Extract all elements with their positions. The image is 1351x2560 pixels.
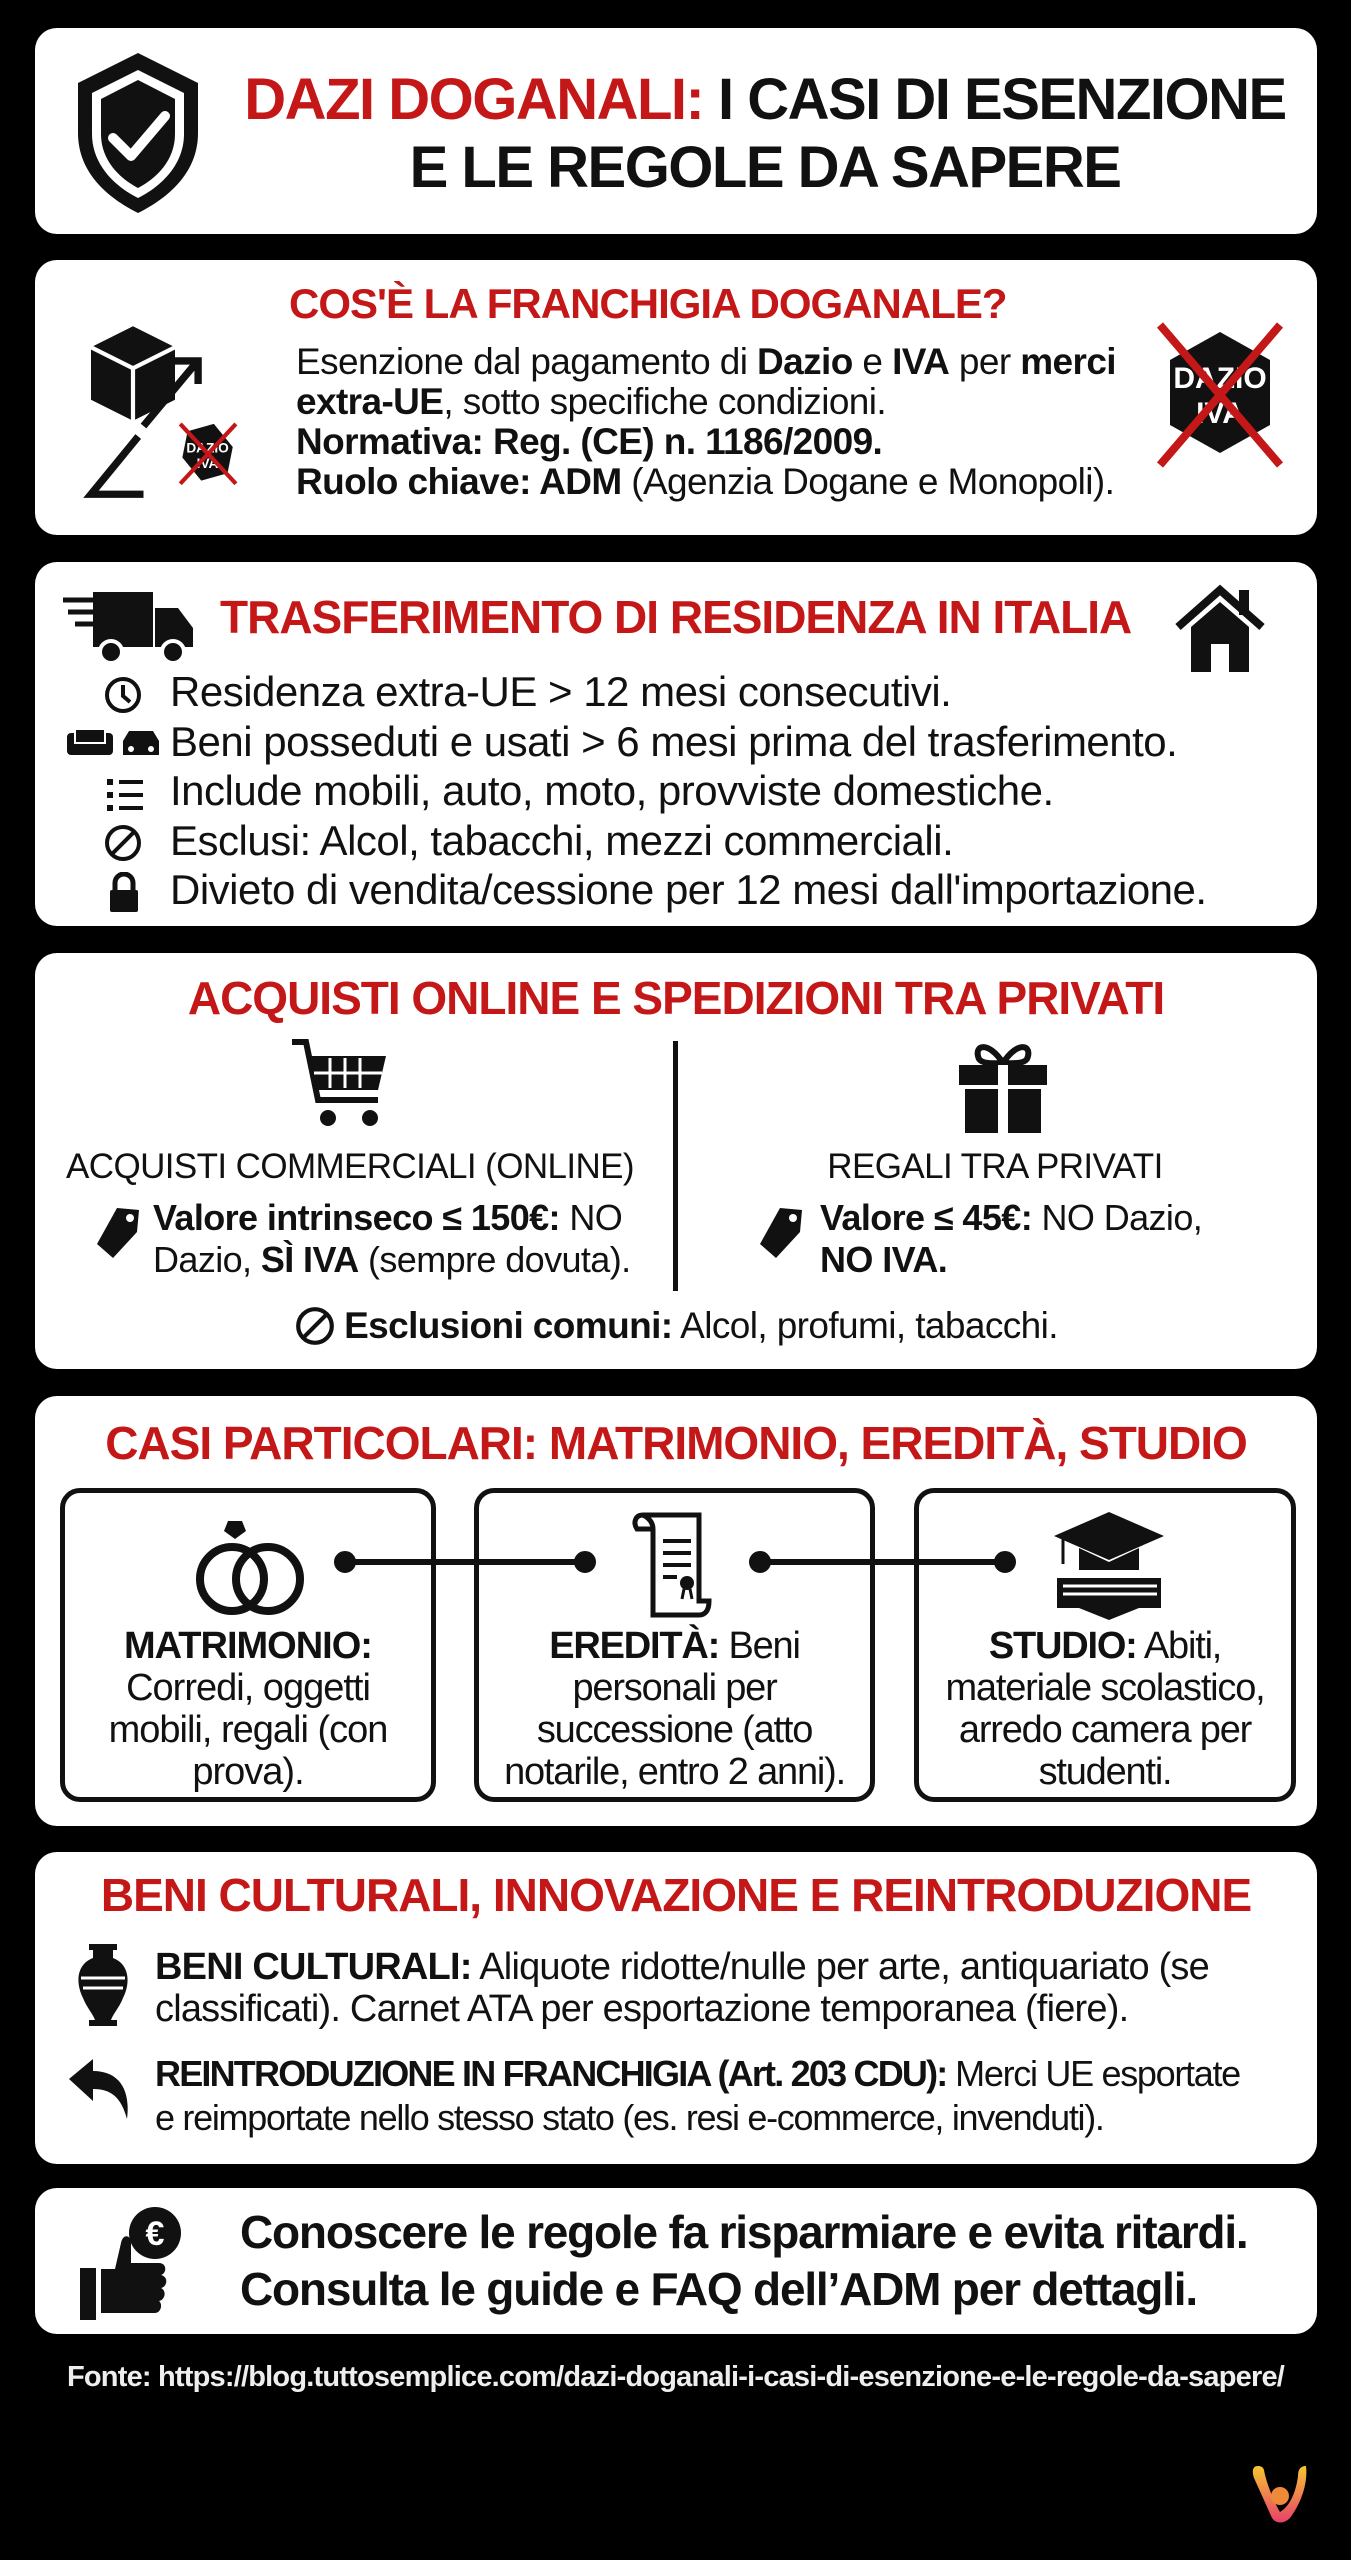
text: conclusione [240, 2206, 1248, 2315]
text: matrimonio: MATRIMONIO: [124, 1625, 372, 1667]
text: eredita [504, 1624, 845, 1793]
text: requisiti: Include mobili, auto, moto, provviste domestiche. [170, 767, 1054, 814]
text: beni culturali: BENI CULTURALI: Aliquote ridotte/nulle per arte, antiquariato (se [155, 1946, 1209, 1988]
text: franchigia body: extra-UE, sotto specifiche condizioni. [296, 381, 886, 422]
text: acquisti commerciali: Dazio, SÌ IVA (sempre dovuta). [153, 1239, 631, 1280]
icon: logo [1252, 2466, 1306, 2522]
panel: casi particolari [35, 1396, 1317, 1826]
text: acquisti commerciali: ACQUISTI COMMERCIALI (ONLINE) [66, 1147, 634, 1186]
card: eredita [474, 1488, 875, 1802]
icon: amphora [78, 1944, 128, 2026]
icon: gift [959, 1044, 1047, 1133]
icon: forbidden [105, 825, 141, 861]
heading: title: E LE REGOLE DA SAPERE [410, 135, 1120, 200]
text: matrimonio: Corredi, oggetti [126, 1667, 370, 1709]
panel: franchigia [35, 260, 1317, 535]
text: beni culturali [155, 1946, 1209, 2030]
icon: lock [110, 872, 138, 912]
text: reintroduzione: e reimportate nello stesso stato (es. resi e-commerce, invenduti). [155, 2097, 1104, 2138]
text: matrimonio [109, 1625, 387, 1793]
icon: crossed dazio iva: DAZIO [1173, 362, 1267, 395]
text: regali tra privati [760, 1147, 1202, 1280]
text: beni culturali: classificati). Carnet ATA per esportazione temporanea (fiere). [155, 1988, 1128, 2030]
text: franchigia body: Esenzione dal pagamento di Dazio e IVA per merci [296, 341, 1116, 382]
icon: truck [63, 592, 193, 661]
text: eredita: EREDITÀ: Beni [549, 1625, 800, 1667]
text: conclusione: Conoscere le regole fa risparmiare e evita ritardi. [240, 2206, 1248, 2258]
icon: scroll [632, 1512, 712, 1618]
icon: box with arrow: DAZIO [186, 440, 229, 455]
icon: box with arrow [83, 326, 238, 498]
icon: graduation cap and book [1054, 1512, 1164, 1620]
icon: sofa and car [67, 730, 159, 755]
text: acquisti commerciali [66, 1147, 634, 1280]
icon: tag [760, 1208, 802, 1258]
heading: franchigia: COS'È LA FRANCHIGIA DOGANALE? [289, 280, 1007, 327]
text: reintroduzione [155, 2053, 1240, 2138]
text: requisiti: Residenza extra-UE > 12 mesi consecutivi. [170, 668, 951, 715]
divider [673, 1041, 678, 1291]
icon: house [1175, 584, 1265, 672]
heading: casi particolari: CASI PARTICOLARI: MATRIMONIO, EREDITÀ, STUDIO [105, 1417, 1247, 1469]
text: matrimonio: prova). [192, 1751, 304, 1793]
text: regali tra privati: REGALI TRA PRIVATI [827, 1147, 1163, 1186]
text: reintroduzione: REINTRODUZIONE IN FRANCHIGIA (Art. 203 CDU): Merci UE esportate [155, 2053, 1240, 2094]
text: studio: studenti. [1039, 1751, 1171, 1793]
text: requisiti: Esclusi: Alcol, tabacchi, mezzi commerciali. [170, 816, 953, 864]
icon: box with arrow: IVA [197, 456, 219, 471]
text: eredita: notarile, entro 2 anni). [504, 1751, 845, 1793]
text: eredita: successione (atto [537, 1709, 812, 1751]
text: conclusione: Consulta le guide e FAQ dell’ADM per dettagli. [240, 2263, 1197, 2315]
card: matrimonio [60, 1488, 436, 1802]
icon: crossed dazio iva: IVA [1196, 397, 1244, 430]
icon: tag [97, 1208, 139, 1258]
icon: thumbs up with euro: € [146, 2215, 165, 2253]
text: studio [945, 1625, 1265, 1793]
text: requisiti: Beni posseduti e usati > 6 mesi prima del trasferimento. [170, 718, 1177, 764]
text: acquisti commerciali: Valore intrinseco ≤ 150€: NO [153, 1197, 622, 1238]
panel: trasferimento [35, 562, 1317, 926]
icon: crossed dazio iva [1157, 322, 1283, 468]
icon: cart [292, 1039, 386, 1126]
text: regali tra privati: Valore ≤ 45€: NO Dazio, [820, 1197, 1202, 1238]
text: eredita: personali per [572, 1667, 777, 1709]
text: studio: STUDIO: Abiti, [989, 1625, 1221, 1667]
panel: beni culturali [35, 1852, 1317, 2164]
text: regali tra privati: NO IVA. [820, 1239, 947, 1280]
heading: acquisti: ACQUISTI ONLINE E SPEDIZIONI TRA PRIVATI [188, 972, 1164, 1024]
text: franchigia body: Ruolo chiave: ADM (Agenzia Dogane e Monopoli). [296, 461, 1114, 502]
text: studio: materiale scolastico, [945, 1667, 1265, 1709]
icon: thumbs up with euro [80, 2207, 181, 2320]
icon: return arrow [69, 2059, 128, 2119]
text: requisiti: Divieto di vendita/cessione per 12 mesi dall'importazione. [170, 866, 1207, 913]
icon: list [107, 779, 143, 811]
text: esclusioni comuni: Esclusioni comuni: Alcol, profumi, tabacchi. [344, 1305, 1058, 1346]
text: matrimonio: mobili, regali (con [109, 1709, 387, 1751]
panel: title [35, 28, 1317, 234]
panel: conclusione [35, 2188, 1317, 2334]
heading: title [244, 67, 1286, 200]
heading: trasferimento: TRASFERIMENTO DI RESIDENZA IN ITALIA [220, 591, 1131, 643]
text: studio: arredo camera per [959, 1709, 1251, 1751]
text: franchigia body [296, 341, 1116, 502]
card: studio [914, 1488, 1296, 1802]
icon: clock [105, 677, 141, 713]
text: source: Fonte: https://blog.tuttosemplice.com/dazi-doganali-i-casi-di-esenzione-e-le-regole-da-sapere/ [67, 2361, 1284, 2393]
panel: acquisti online [35, 953, 1317, 1369]
list: requisiti [67, 668, 1207, 913]
heading: title: DAZI DOGANALI: I CASI DI ESENZIONE [244, 67, 1286, 132]
heading: beni culturali: BENI CULTURALI, INNOVAZIONE E REINTRODUZIONE [101, 1869, 1251, 1921]
connector lines [334, 1551, 1016, 1573]
icon: rings [196, 1521, 304, 1615]
icon: shield [78, 53, 198, 213]
text: franchigia body: Normativa: Reg. (CE) n. 1186/2009. [296, 421, 882, 462]
text: requisiti [170, 668, 1207, 913]
